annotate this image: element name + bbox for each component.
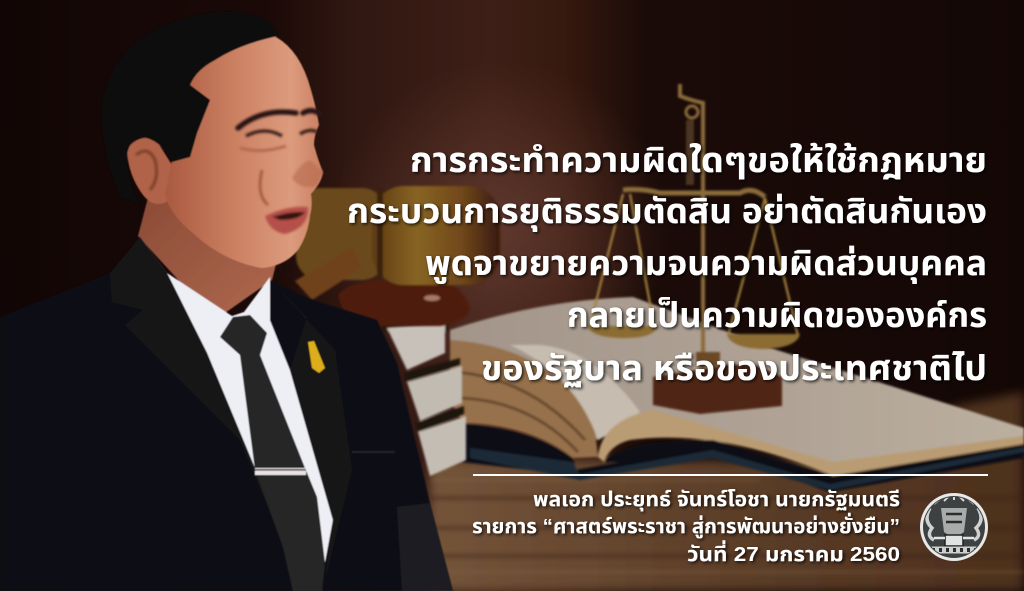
scale beam — [623, 189, 765, 197]
gavel head — [296, 188, 386, 280]
mouth — [265, 207, 308, 234]
emblem lower band — [931, 546, 977, 554]
ear — [127, 138, 172, 204]
main quote text — [347, 141, 987, 388]
wooden block — [653, 352, 782, 414]
tie — [220, 315, 325, 591]
tie clip — [255, 468, 306, 475]
face — [165, 34, 323, 268]
pocket — [352, 451, 395, 453]
attribution text — [472, 489, 900, 566]
stack of books — [383, 322, 466, 476]
sleeve highlight — [397, 503, 453, 591]
eyes — [246, 130, 317, 136]
speaker name: พลเอก ประยุทธ์ จันทร์โอชา นายกรัฐมนตรี — [533, 489, 900, 511]
left page block — [450, 340, 598, 458]
hair — [102, 12, 278, 205]
quote line 1: การกระทำความผิดใดๆขอให้ใช้กฎหมาย — [410, 141, 987, 180]
wooden table — [430, 392, 1024, 591]
quote line 3: พูดจาขยายความจนความผิดส่วนบุคคล — [425, 244, 987, 284]
divider line — [473, 474, 988, 476]
shirt — [140, 237, 333, 563]
book cover shadow — [463, 424, 1024, 492]
chains — [590, 194, 798, 336]
nose — [292, 160, 323, 187]
emblem central bowl — [941, 508, 967, 536]
quote line 5: ของรัฐบาล หรือของประเทศชาติไป — [481, 349, 987, 388]
neck — [138, 190, 282, 320]
gavel — [295, 186, 500, 326]
gavel base — [338, 280, 470, 326]
scale pans — [587, 326, 657, 338]
lapel pin — [308, 341, 325, 373]
emblem lions — [927, 508, 981, 540]
emblem crown rays — [934, 497, 974, 505]
facial features — [238, 111, 323, 234]
eyebrows — [238, 111, 320, 128]
left lapel — [110, 237, 290, 560]
book pages — [450, 297, 1024, 466]
quote line 4: กลายเป็นความผิดขององค์กร — [567, 296, 987, 335]
balance scales — [587, 84, 800, 372]
suit — [0, 237, 453, 591]
date: วันที่ 27 มกราคม 2560 — [687, 540, 900, 566]
gavel handle — [295, 247, 362, 300]
icon: government emblem — [920, 493, 988, 561]
open book — [450, 297, 1024, 492]
programme name: รายการ “ศาสตร์พระราชา สู่การพัฒนาอย่างยั่งยืน” — [472, 513, 900, 538]
person — [0, 12, 453, 591]
right page block — [598, 410, 1024, 476]
right lapel — [270, 280, 352, 580]
scale hook and post — [680, 84, 703, 372]
quote line 2: กระบวนการยุติธรรมตัดสิน อย่าตัดสินกันเอง — [347, 192, 987, 232]
emblem altar — [945, 535, 963, 546]
